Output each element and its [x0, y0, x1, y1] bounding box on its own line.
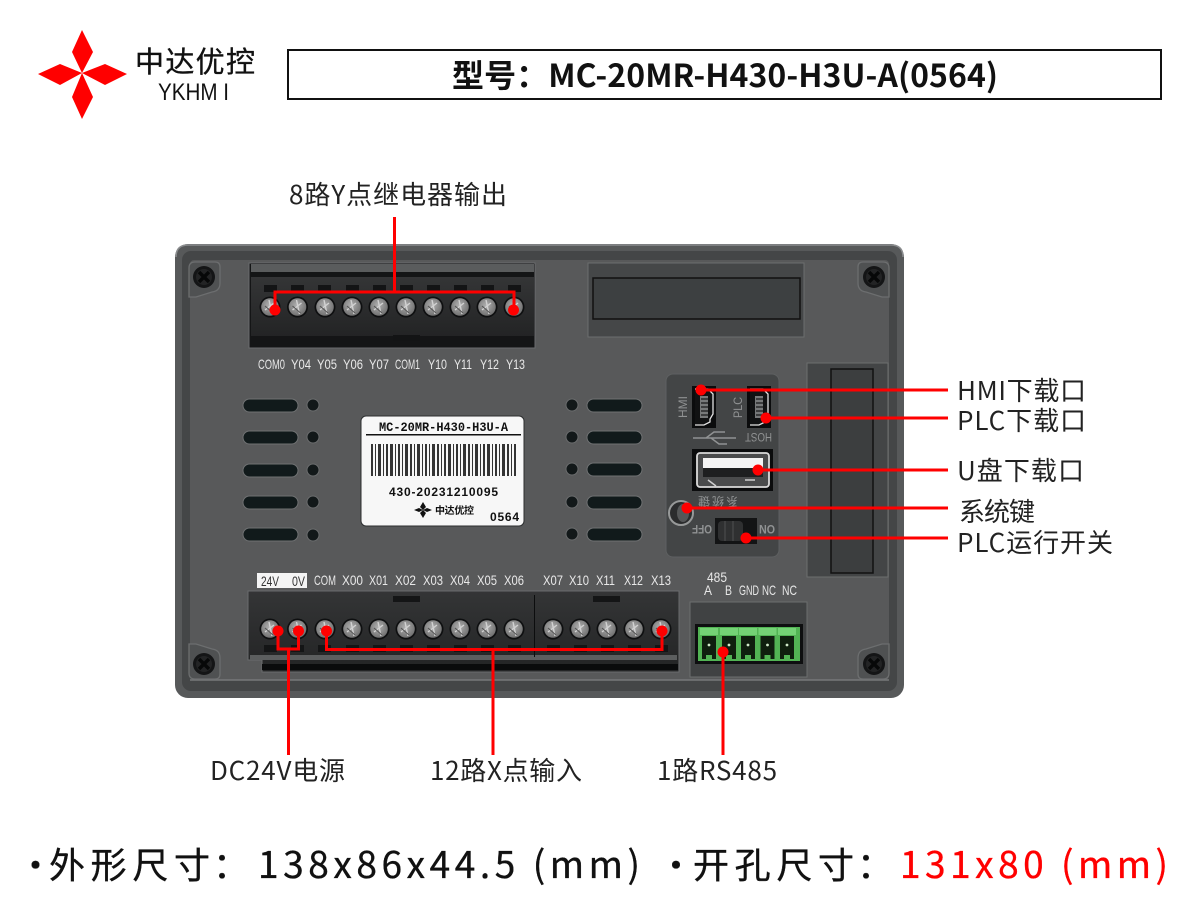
bottom terminal labels: X02	[395, 572, 416, 588]
callout: 12 X inputs	[321, 626, 668, 788]
title: 型号：MC-20MR-H430-H3U-A(0564)	[452, 51, 998, 97]
callout: RS485	[657, 646, 777, 788]
left vents	[243, 399, 319, 541]
sticker logo	[414, 502, 474, 518]
outer dimensions: ：	[213, 837, 249, 889]
top terminal labels: Y07	[369, 356, 389, 372]
callout: 8 relay outputs: 8路Y点继电器输出	[289, 175, 507, 212]
bottom terminal labels: X12	[624, 572, 643, 588]
product label sticker	[361, 416, 524, 526]
bottom terminal labels: X04	[450, 572, 470, 588]
top terminal labels: Y11	[454, 356, 472, 372]
callout: PLC run switch	[740, 523, 1113, 560]
RS485 labels: A	[704, 582, 713, 598]
top right blank slot	[588, 263, 804, 337]
bottom terminal labels: X03	[423, 572, 443, 588]
top terminal block	[249, 263, 535, 348]
cutout dimensions: 开孔尺寸	[693, 837, 854, 889]
outer dimensions	[18, 835, 640, 889]
barcode	[371, 444, 516, 476]
top terminal labels: Y04	[291, 356, 311, 372]
bottom terminal block	[248, 591, 679, 672]
logo name: 中达优控	[135, 39, 255, 81]
RS485 labels: B	[725, 582, 732, 598]
callout: U disk download port	[752, 451, 1084, 488]
title box	[288, 50, 1161, 99]
system key label: 系统键	[698, 493, 738, 510]
outer dimensions: ·	[18, 837, 54, 889]
USB-A port	[692, 449, 773, 491]
callout: 8 relay outputs	[270, 175, 519, 316]
RS485 labels: NC	[782, 582, 797, 598]
outer dimensions: 外形尺寸	[49, 837, 210, 889]
USB and switch panel	[666, 374, 779, 557]
sticker code: 0564	[490, 510, 519, 524]
bottom terminal labels: X10	[569, 572, 589, 588]
bottom terminal labels: X13	[651, 572, 671, 588]
top terminal labels: Y13	[506, 356, 525, 372]
bottom terminal labels: X01	[369, 572, 388, 588]
callout: HMI download port: HMI下载口	[957, 371, 1086, 408]
icon: red four-point diamond logo	[38, 30, 127, 119]
PLC mini USB port	[747, 386, 771, 428]
bottom terminal labels: X07	[543, 572, 563, 588]
top terminal labels: Y12	[480, 356, 499, 372]
RS485 green connector	[690, 602, 807, 677]
RS485 labels	[704, 569, 797, 598]
bottom terminal labels: X11	[596, 572, 615, 588]
callout: DC24V power: DC24V电源	[210, 751, 345, 788]
RS485 labels: GND	[739, 582, 759, 598]
port text: HMI	[676, 396, 690, 418]
top terminal labels: Y10	[428, 356, 447, 372]
switch text	[692, 522, 775, 536]
callout: system key	[682, 492, 1035, 529]
outer dimensions: 138x86x44.5 (mm)	[258, 835, 640, 889]
cutout dimensions: ·	[658, 837, 694, 889]
port text	[676, 396, 772, 444]
callout: system key: 系统键	[959, 492, 1035, 529]
port text: HOST	[744, 430, 772, 444]
logo	[38, 30, 255, 119]
cutout dimensions	[658, 835, 1168, 889]
power label tag: 24V	[261, 573, 279, 589]
bottom terminal labels: X05	[477, 572, 497, 588]
power label tag	[257, 573, 307, 589]
corner screws	[189, 262, 889, 679]
callout: PLC download port: PLC下载口	[957, 401, 1086, 438]
top terminal labels: Y05	[317, 356, 337, 372]
cutout dimensions: 131x80 (mm)	[900, 835, 1168, 889]
right side blank slot	[807, 363, 888, 577]
power label tag: 0V	[292, 573, 306, 589]
system key button	[669, 501, 693, 525]
bottom terminal labels: COM	[314, 572, 336, 588]
run switch	[715, 518, 757, 544]
top terminal labels: COM1	[395, 356, 420, 372]
switch text: OFF	[692, 522, 712, 536]
bottom terminal labels	[314, 572, 671, 588]
switch text: ON	[759, 522, 775, 536]
logo latin name: YKHM I	[158, 79, 229, 106]
serial number: 430-20231210095	[389, 485, 498, 499]
RS485 labels: NC	[762, 582, 776, 598]
device rear panel	[175, 244, 904, 698]
callout: 12 X inputs: 12路X点输入	[430, 751, 582, 788]
sticker model: MC-20MR-H430-H3U-A	[379, 420, 508, 435]
callout: HMI download port	[696, 371, 1086, 408]
sticker logo: 中达优控	[435, 502, 474, 517]
top terminal labels: Y06	[343, 356, 363, 372]
callout: U disk download port: U盘下载口	[957, 451, 1084, 488]
top terminal labels: COM0	[258, 356, 285, 372]
icon: USB symbol	[693, 432, 736, 444]
callout: DC24V power	[210, 626, 345, 788]
HMI mini USB port	[692, 386, 716, 428]
top terminal labels	[258, 356, 525, 372]
callout: RS485: 1路RS485	[657, 751, 777, 788]
port text: PLC	[731, 397, 745, 418]
right vents	[566, 399, 642, 541]
cutout dimensions: ：	[857, 837, 893, 889]
bottom terminal labels: X06	[504, 572, 524, 588]
bottom terminal labels: X00	[342, 572, 363, 588]
callout: PLC download port	[760, 401, 1086, 438]
callout: PLC run switch: PLC运行开关	[957, 523, 1113, 560]
RS485 labels: 485	[707, 569, 727, 585]
